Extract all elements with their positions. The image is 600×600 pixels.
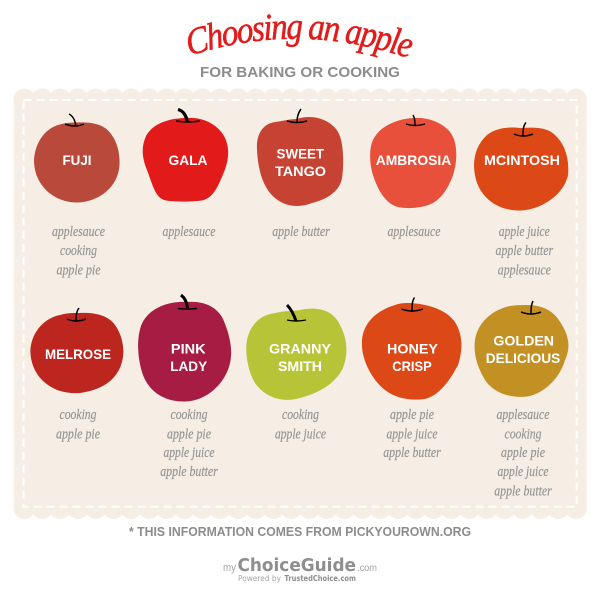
panel: apple varieties xyxy=(14,99,587,508)
logo: myChoiceGuide xyxy=(223,555,377,583)
uses: Golden Delicious: apple juice xyxy=(498,464,549,480)
uses: Ambrosia: applesauce xyxy=(388,224,441,240)
uses: Honey Crisp: apple pie xyxy=(390,407,434,423)
apple: Melrose: MELROSE xyxy=(45,346,111,362)
apple: Golden Delicious: GOLDEN xyxy=(493,332,554,348)
apple: McIntosh: MCINTOSH xyxy=(484,152,560,168)
uses: Gala: applesauce xyxy=(162,224,216,240)
apple: McIntosh xyxy=(474,122,568,211)
uses: Melrose xyxy=(56,407,100,442)
apple: Pink Lady: PINK xyxy=(171,340,206,356)
uses: Fuji: applesauce xyxy=(52,224,105,240)
apple: Pink Lady: LADY xyxy=(170,358,208,374)
uses: Golden Delicious: cooking xyxy=(504,426,542,442)
uses: Granny Smith: cooking xyxy=(282,407,319,423)
uses: McIntosh xyxy=(496,224,553,278)
uses: Golden Delicious xyxy=(494,407,552,500)
apple: Granny Smith xyxy=(246,305,346,400)
apple: Melrose xyxy=(30,308,123,393)
uses: Golden Delicious: apple pie xyxy=(501,445,545,461)
apple: Fuji: FUJI xyxy=(62,152,92,168)
apple: Gala xyxy=(143,110,228,202)
apple: Gala: GALA xyxy=(168,152,208,168)
apple: Golden Delicious: DELICIOUS xyxy=(486,350,560,366)
uses: Granny Smith: apple juice xyxy=(275,426,326,442)
subtitle: FOR BAKING OR COOKING xyxy=(200,64,400,81)
apple: Honey Crisp: HONEY xyxy=(387,340,439,356)
apple: Pink Lady xyxy=(138,295,231,402)
uses: Golden Delicious: applesauce xyxy=(496,407,550,423)
apple: Honey Crisp xyxy=(362,298,461,400)
apple: Sweet Tango: SWEET xyxy=(277,146,324,162)
apple: Ambrosia: AMBROSIA xyxy=(376,152,451,168)
uses: Honey Crisp: apple juice xyxy=(386,426,438,442)
uses: Fuji: apple pie xyxy=(56,262,101,278)
uses: Honey Crisp: apple butter xyxy=(383,445,441,461)
apple: Ambrosia xyxy=(370,115,456,208)
uses: Pink Lady: cooking xyxy=(170,407,208,423)
apple: Golden Delicious xyxy=(475,301,568,397)
uses: Pink Lady: apple butter xyxy=(160,464,218,480)
uses: McIntosh: apple butter xyxy=(496,243,553,259)
logo: myChoiceGuide: Powered by xyxy=(238,574,282,583)
apple: Fuji xyxy=(34,114,120,202)
logo: myChoiceGuide: ChoiceGuide xyxy=(238,555,356,576)
uses: Sweet Tango: apple butter xyxy=(272,224,330,240)
logo: myChoiceGuide: my xyxy=(223,562,236,574)
uses: Pink Lady: apple juice xyxy=(164,445,215,461)
uses: Pink Lady xyxy=(160,407,218,480)
apple: Sweet Tango xyxy=(257,109,343,206)
uses: Fuji: cooking xyxy=(60,243,97,259)
logo: myChoiceGuide: .com xyxy=(357,563,377,574)
uses: Melrose: apple pie xyxy=(56,426,100,442)
apple: Granny Smith: GRANNY xyxy=(269,340,332,356)
apple: Granny Smith: SMITH xyxy=(278,358,322,374)
apple: Honey Crisp: CRISP xyxy=(392,358,432,374)
footnote: * THIS INFORMATION COMES FROM PICKYOUROWN.ORG xyxy=(129,524,471,539)
uses: Honey Crisp xyxy=(383,407,441,461)
uses: Pink Lady: apple pie xyxy=(167,426,211,442)
uses: Golden Delicious: apple butter xyxy=(494,484,552,500)
apple: Sweet Tango: TANGO xyxy=(275,163,326,179)
uses: McIntosh: applesauce xyxy=(498,262,551,278)
uses: Melrose: cooking xyxy=(60,407,97,423)
title: Choosing an apple xyxy=(188,14,412,58)
uses: McIntosh: apple juice xyxy=(499,224,550,240)
uses: Fuji xyxy=(52,224,105,278)
uses: Granny Smith xyxy=(275,407,326,442)
logo: myChoiceGuide: TrustedChoice.com xyxy=(284,574,356,583)
